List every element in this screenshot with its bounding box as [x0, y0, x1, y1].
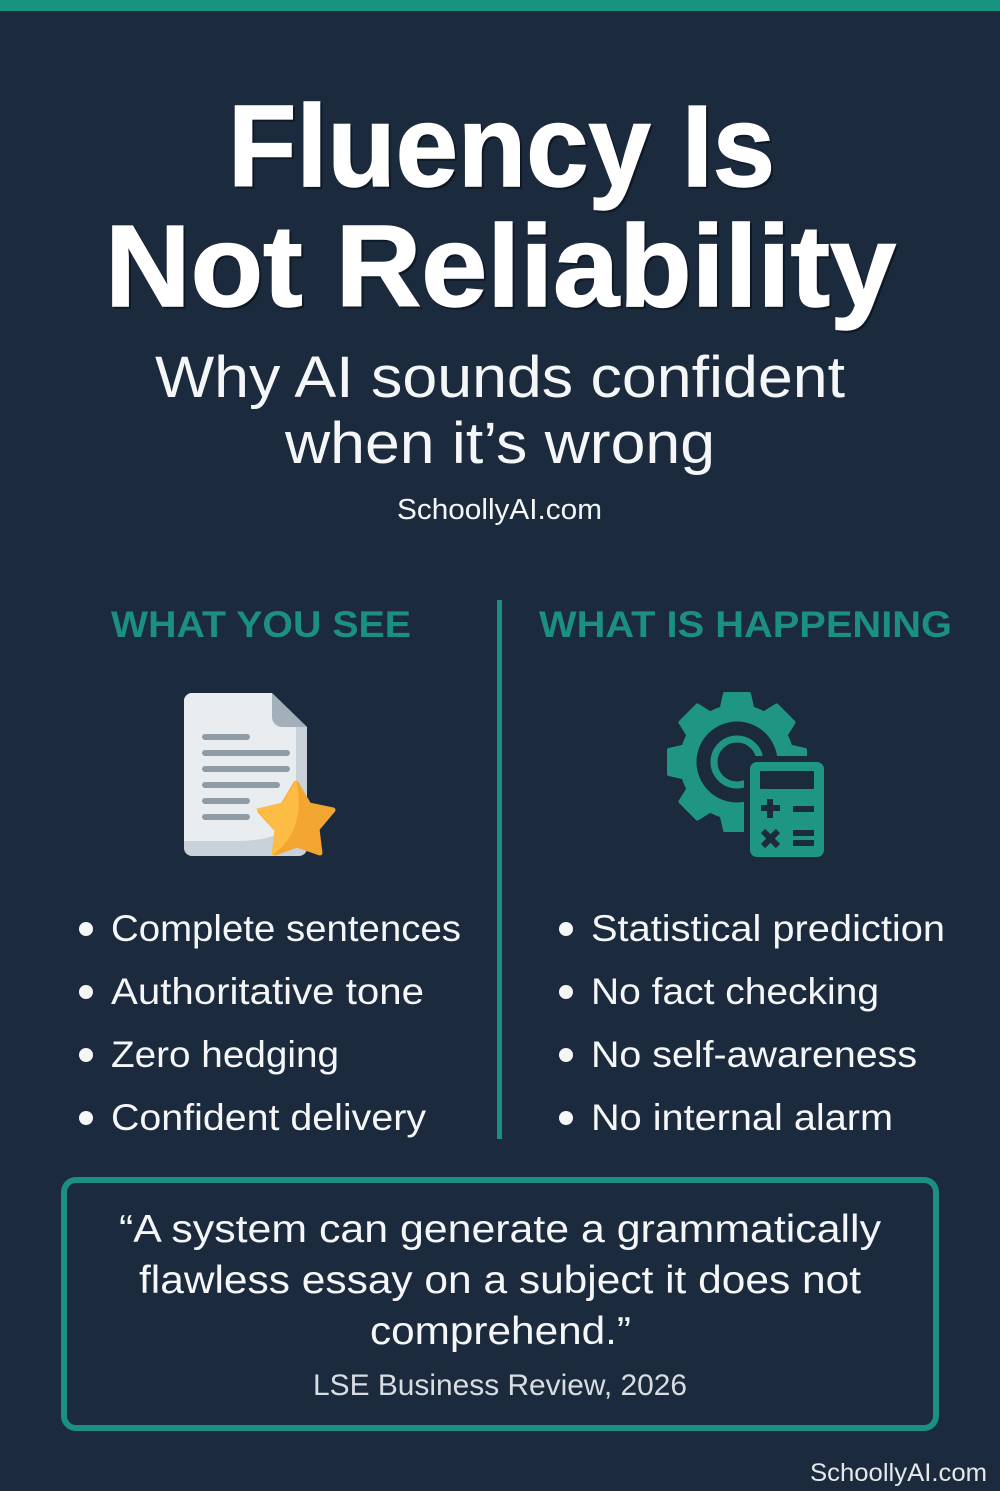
- bullet list: what is happening: Statistical prediction: [591, 908, 945, 949]
- title: Not Reliability: [107, 203, 898, 333]
- bullet list: what you see: [79, 908, 461, 1138]
- subtitle: Why AI sounds confident: [155, 345, 845, 410]
- quote text: flawless essay on a subject it does not: [139, 1259, 861, 1302]
- subtitle: when it’s wrong: [284, 411, 715, 476]
- quote attribution: LSE Business Review, 2026: [313, 1369, 687, 1402]
- bullet list: what is happening: No internal alarm: [591, 1097, 893, 1138]
- bullet list: what is happening: No fact checking: [591, 971, 879, 1012]
- bullet list: what you see: Confident delivery: [111, 1097, 427, 1138]
- site name: SchoollyAI.com: [397, 494, 602, 526]
- quote text: “A system can generate a grammatically: [119, 1208, 882, 1251]
- heading: what you see: WHAT YOU SEE: [111, 604, 411, 645]
- bullet list: what is happening: No self-awareness: [591, 1034, 917, 1075]
- subtitle: [155, 345, 845, 476]
- title: Fluency Is: [230, 83, 777, 213]
- quote text: comprehend.”: [370, 1310, 631, 1353]
- panel: what is happening: [539, 604, 952, 1138]
- panel: what you see: [79, 604, 461, 1138]
- bullet list: what you see: Zero hedging: [111, 1034, 339, 1075]
- title: Not Reliability: [105, 201, 896, 331]
- bullet list: what you see: Authoritative tone: [111, 971, 424, 1012]
- top accent bar: [0, 0, 1000, 11]
- title: Fluency Is: [228, 81, 775, 211]
- bullet list: what you see: Complete sentences: [111, 908, 461, 949]
- footer watermark: SchoollyAI.com: [810, 1459, 987, 1487]
- quote text: [119, 1208, 882, 1353]
- heading: what is happening: WHAT IS HAPPENING: [539, 604, 952, 645]
- icon: document with star: [184, 693, 333, 856]
- icon: gear and calculator: [669, 694, 834, 864]
- bullet list: what is happening: [559, 908, 945, 1138]
- title: [105, 81, 898, 333]
- centre divider: [497, 600, 502, 1139]
- callout: quote box: [64, 1180, 936, 1428]
